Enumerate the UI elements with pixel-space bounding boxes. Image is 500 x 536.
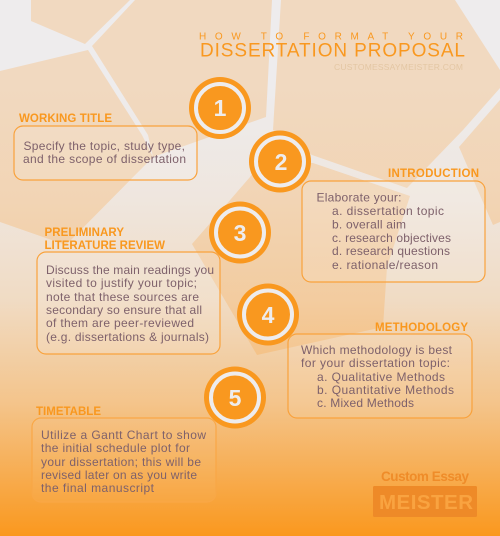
card: timetable: revised later on as you write bbox=[41, 468, 197, 482]
panel: timetable bbox=[32, 406, 216, 502]
step 1 badge bbox=[189, 77, 251, 139]
step 1 badge: 1 bbox=[214, 95, 227, 121]
card: preliminary literature review: note that these sources are bbox=[46, 290, 199, 304]
card: timetable: the final manuscript bbox=[41, 481, 155, 495]
card: methodology: b. Quantitative Methods bbox=[317, 383, 454, 397]
card: introduction: e. rationale/reason bbox=[332, 258, 438, 272]
heading: working title: WORKING TITLE bbox=[19, 113, 112, 125]
card: timetable: your dissertation; this will be bbox=[41, 455, 201, 469]
card: methodology: c. Mixed Methods bbox=[317, 396, 414, 410]
card: preliminary literature review: secondary so ensure that all bbox=[46, 303, 202, 317]
logo: custom essay meister: Custom Essay bbox=[381, 469, 469, 484]
panel: methodology bbox=[288, 322, 472, 418]
card: methodology: a. Qualitative Methods bbox=[317, 370, 445, 384]
card: working title: Specify the topic, study type, bbox=[24, 139, 185, 153]
card: preliminary literature review: visited to justify your topic; bbox=[46, 276, 197, 290]
panel: preliminary literature review bbox=[37, 227, 220, 354]
card: introduction: a. dissertation topic bbox=[332, 204, 444, 218]
card: timetable bbox=[32, 418, 216, 502]
step 2 badge: 2 bbox=[275, 149, 287, 175]
step 5 badge: 5 bbox=[229, 385, 242, 411]
step 3 badge bbox=[209, 202, 271, 264]
card: preliminary literature review: (e.g. dissertations & journals) bbox=[46, 330, 209, 344]
title: DISSERTATION PROPOSAL bbox=[200, 40, 465, 62]
card: timetable: Utilize a Gantt Chart to show bbox=[41, 428, 206, 442]
card: timetable: the initial schedule plot for bbox=[41, 441, 190, 455]
card: methodology: Which methodology is best bbox=[301, 343, 453, 357]
card: introduction: c. research objectives bbox=[332, 231, 451, 245]
card: introduction: d. research questions bbox=[332, 244, 450, 258]
panel: working title bbox=[14, 113, 197, 180]
heading: methodology: METHODOLOGY bbox=[375, 322, 468, 334]
card: introduction: Elaborate your: bbox=[316, 190, 402, 204]
card: preliminary literature review: Discuss the main readings you bbox=[46, 263, 214, 277]
card: introduction: b. overall aim bbox=[332, 218, 406, 232]
step 5 badge bbox=[204, 366, 266, 428]
card: working title: and the scope of dissertation bbox=[23, 152, 186, 166]
step 3 badge: 3 bbox=[234, 220, 246, 246]
website url: CUSTOMESSAYMEISTER.COM bbox=[334, 62, 463, 72]
heading: introduction: INTRODUCTION bbox=[388, 168, 479, 180]
card: introduction bbox=[302, 181, 485, 282]
card: methodology bbox=[288, 334, 472, 418]
logo: custom essay meister: MEISTER bbox=[379, 491, 473, 514]
card: working title bbox=[14, 126, 197, 180]
heading: preliminary literature review: PRELIMINARY bbox=[44, 227, 124, 239]
panel: introduction bbox=[302, 168, 485, 282]
title bbox=[199, 32, 465, 62]
heading: preliminary literature review: LITERATURE REVIEW bbox=[44, 240, 165, 252]
card: preliminary literature review bbox=[37, 252, 220, 354]
step 2 badge bbox=[249, 130, 311, 192]
step 4 badge bbox=[237, 284, 299, 346]
heading: timetable: TIMETABLE bbox=[36, 406, 101, 418]
title: HOW TO FORMAT YOUR bbox=[199, 32, 463, 42]
card: methodology: for your dissertation topic: bbox=[301, 356, 450, 370]
heading: preliminary literature review bbox=[44, 227, 165, 252]
step 4 badge: 4 bbox=[262, 302, 275, 328]
logo: custom essay meister bbox=[373, 469, 477, 517]
card: preliminary literature review: of them are peer-reviewed bbox=[46, 316, 194, 330]
